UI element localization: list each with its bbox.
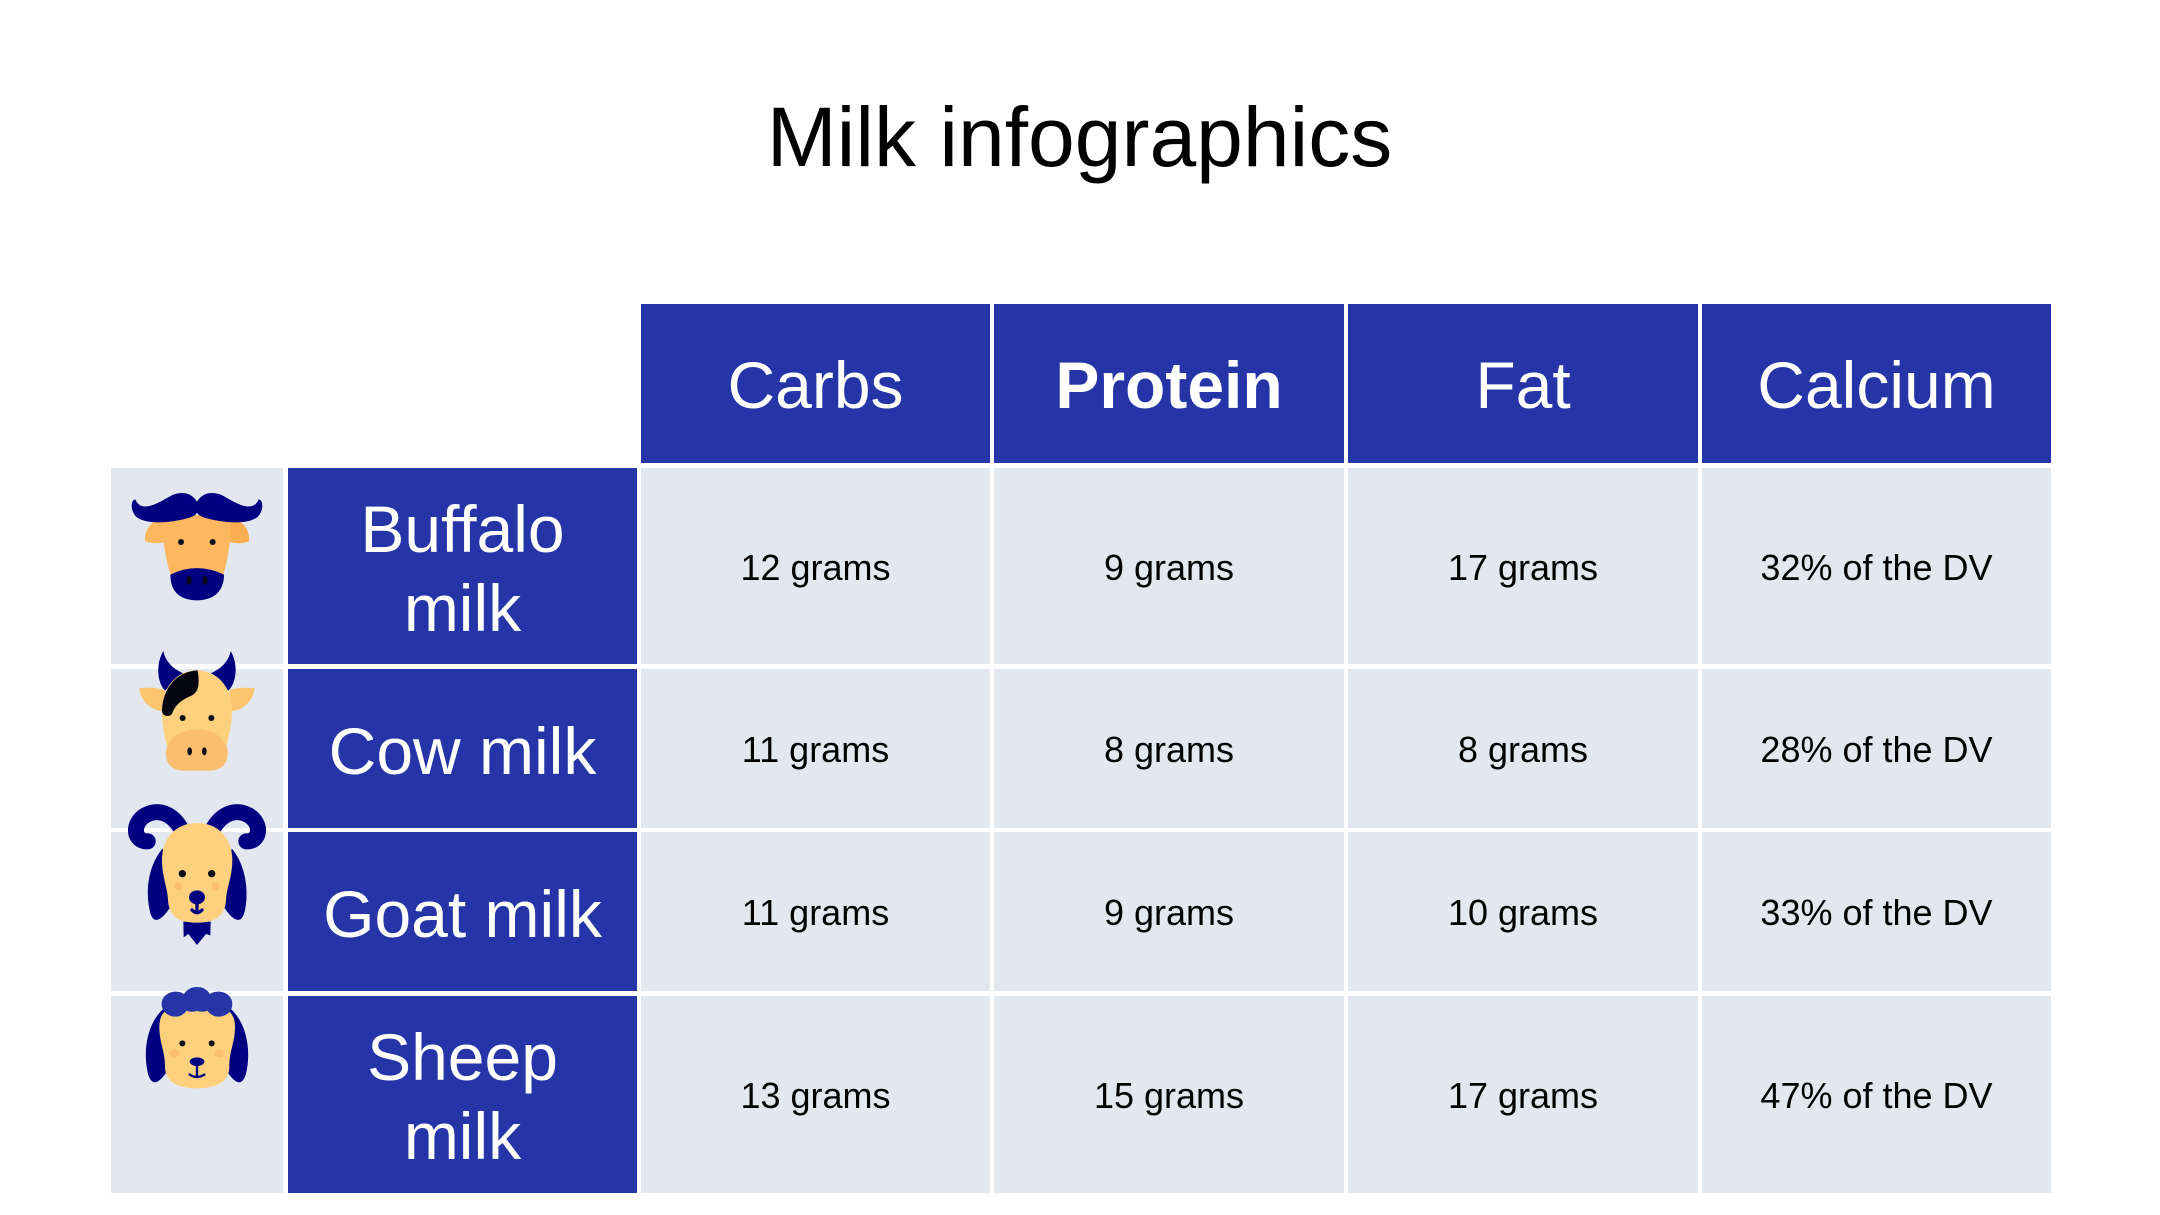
row label: Sheep milk (288, 996, 637, 1193)
icon cell: buffalo row (111, 468, 283, 664)
table header: Carbs: Carbs (727, 348, 904, 422)
goat protein: 9 grams (1104, 892, 1234, 933)
buffalo fat: 17 grams (1448, 546, 1598, 588)
icon: cow (139, 651, 255, 771)
icon: sheep (146, 987, 248, 1088)
table header: Protein: Protein (1055, 348, 1283, 422)
table header: Fat: Fat (1475, 348, 1571, 422)
cow fat (1348, 669, 1698, 828)
sheep fat (1348, 996, 1698, 1193)
cow calcium: 28% of the DV (1760, 729, 1993, 770)
table header: Carbs (641, 304, 990, 463)
buffalo protein: 9 grams (1104, 546, 1234, 588)
row label: Buffalo milk (288, 468, 637, 664)
row label: Sheep milk: Sheep (367, 1020, 558, 1094)
buffalo calcium (1702, 468, 2051, 664)
goat carbs (641, 832, 990, 991)
cow protein: 8 grams (1104, 729, 1234, 770)
buffalo calcium: 32% of the DV (1760, 546, 1993, 588)
cow fat: 8 grams (1458, 729, 1588, 770)
title: Milk infographics (767, 90, 1392, 184)
row label: Buffalo milk: Buffalo (360, 492, 565, 566)
cow calcium (1702, 669, 2051, 828)
icon cell: cow row (111, 669, 283, 828)
icon cell: goat row (111, 832, 283, 991)
cow carbs (641, 669, 990, 828)
table header: Calcium: Calcium (1757, 348, 1996, 422)
sheep calcium (1702, 996, 2051, 1193)
goat protein (994, 832, 1344, 991)
buffalo fat (1348, 468, 1698, 664)
icon: goat (136, 812, 258, 945)
buffalo carbs (641, 468, 990, 664)
sheep fat: 17 grams (1448, 1075, 1598, 1116)
sheep protein (994, 996, 1344, 1193)
table header: Fat (1348, 304, 1698, 463)
icon cell: sheep row (111, 996, 283, 1193)
row label: Cow milk (288, 669, 637, 828)
buffalo carbs: 12 grams (740, 546, 891, 588)
row label: Sheep milk: milk (404, 1099, 521, 1173)
sheep calcium: 47% of the DV (1760, 1075, 1993, 1116)
goat carbs: 11 grams (742, 892, 889, 933)
icon: buffalo (132, 493, 262, 600)
row label: Cow milk: Cow milk (329, 714, 596, 788)
cow protein (994, 669, 1344, 828)
row label: Goat milk (288, 832, 637, 991)
table header: Protein (994, 304, 1344, 463)
sheep protein: 15 grams (1094, 1075, 1244, 1116)
sheep carbs: 13 grams (740, 1075, 891, 1116)
cow carbs: 11 grams (742, 729, 889, 770)
row label: Buffalo milk: milk (404, 570, 521, 644)
goat fat: 10 grams (1448, 892, 1598, 933)
goat fat (1348, 832, 1698, 991)
sheep carbs (641, 996, 990, 1193)
buffalo protein (994, 468, 1344, 664)
goat calcium: 33% of the DV (1760, 892, 1993, 933)
goat calcium (1702, 832, 2051, 991)
row label: Goat milk: Goat milk (323, 876, 602, 950)
table header: Calcium (1702, 304, 2051, 463)
